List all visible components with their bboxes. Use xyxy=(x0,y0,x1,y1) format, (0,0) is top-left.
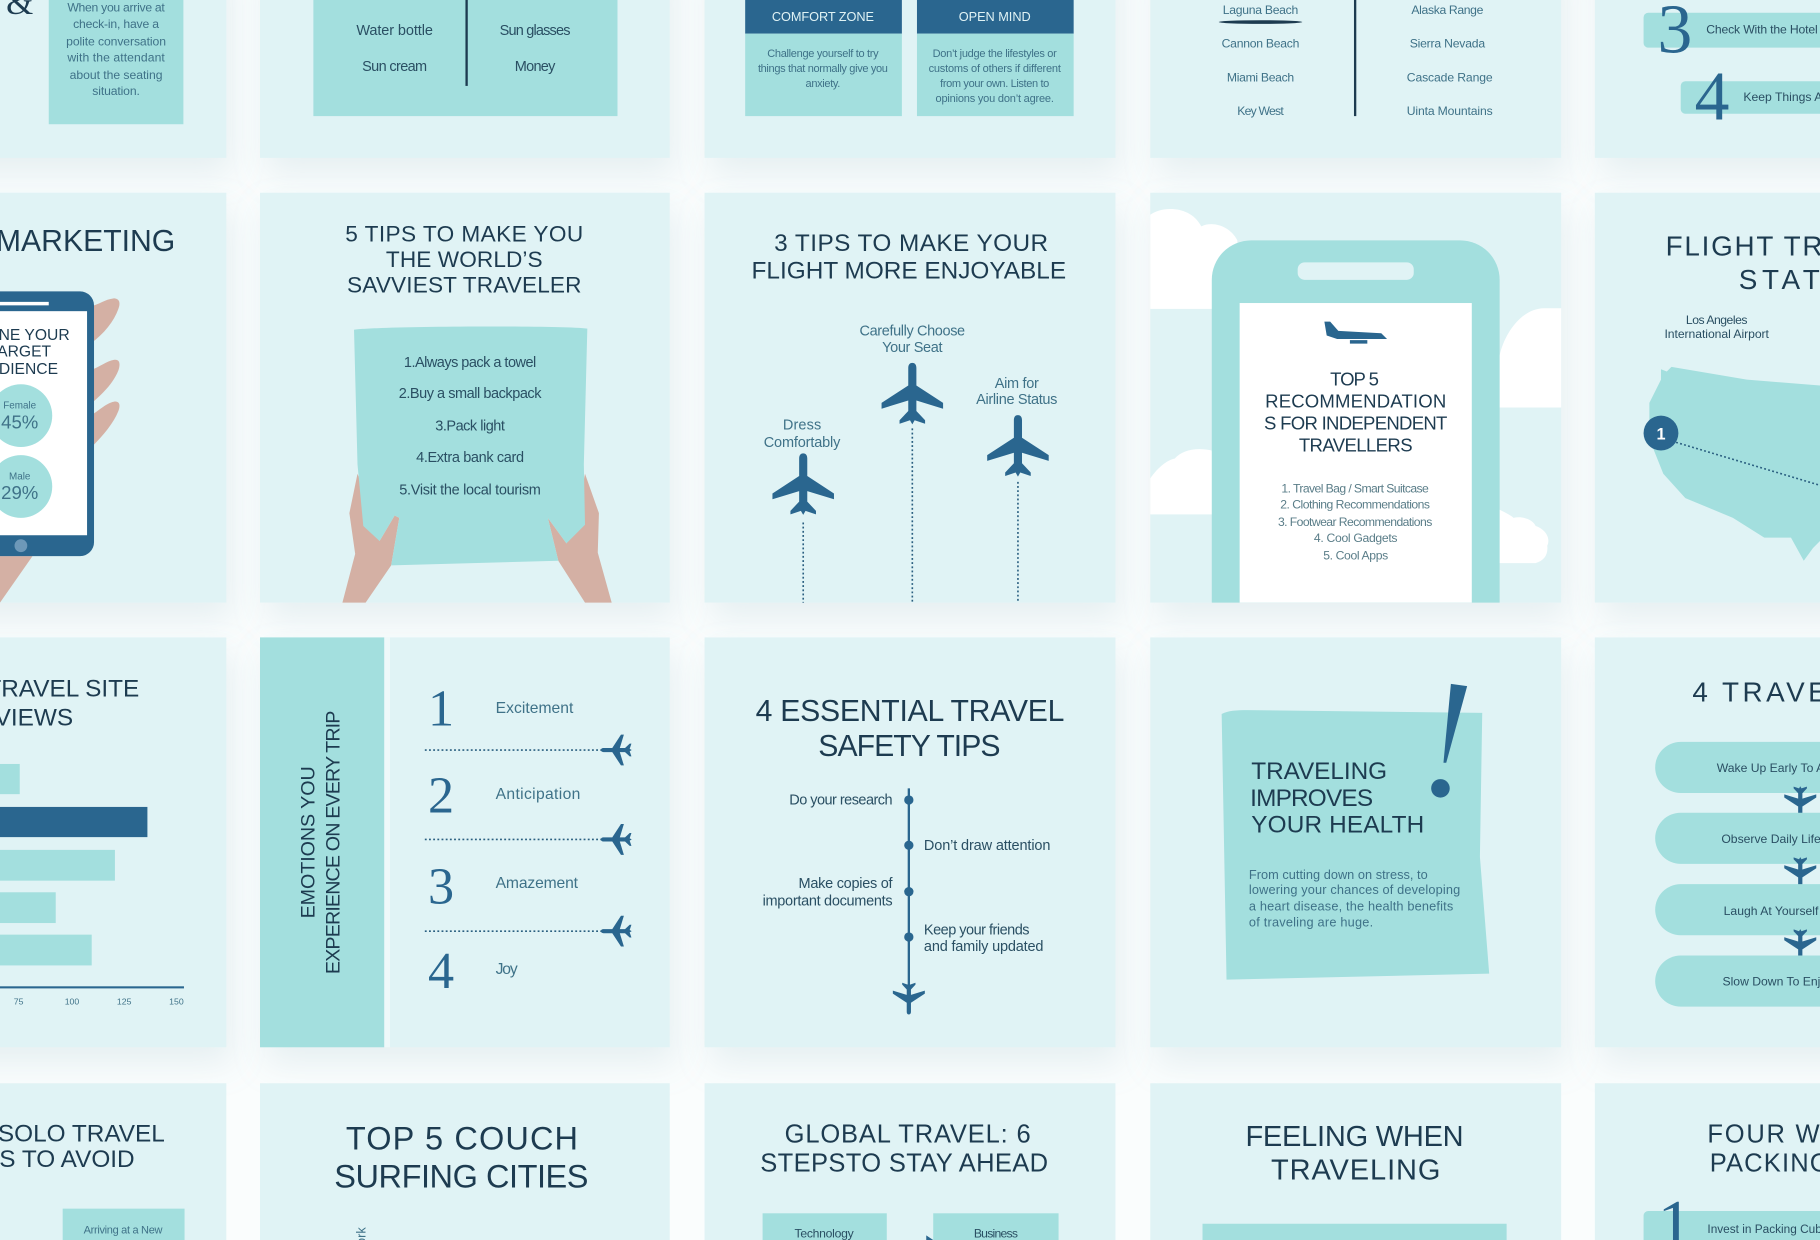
mint text box: Arriving at a New xyxy=(84,1225,163,1237)
mint text box xyxy=(63,1209,185,1240)
heading xyxy=(1707,1120,1820,1177)
paper sheet xyxy=(354,326,587,565)
safety tips: Don’t draw attention xyxy=(924,838,1050,854)
heading xyxy=(1666,230,1820,295)
mint sidebar with rotated heading: EXPERIENCE ON EVERY TRIP xyxy=(323,711,345,974)
male stat: Male xyxy=(9,472,31,483)
panel: 4 travel tips pills xyxy=(1595,637,1820,1047)
phone screen xyxy=(1240,303,1472,603)
map: western United States xyxy=(1649,367,1820,561)
mountain ranges column: Alaska Range xyxy=(1411,3,1484,17)
heading xyxy=(1250,758,1424,838)
mint list box: Sun cream xyxy=(362,59,427,75)
step 1 xyxy=(1644,1187,1820,1240)
body text: of traveling are huge. xyxy=(1249,915,1373,930)
male stat xyxy=(0,455,52,518)
tip: dress comfortably: Dress xyxy=(783,418,821,434)
mountain ranges column: Cascade Range xyxy=(1407,70,1493,84)
tip: airline status: Aim for xyxy=(995,376,1039,392)
body text: From cutting down on stress, to xyxy=(1249,867,1428,882)
beaches column xyxy=(1219,3,1302,118)
heading: FEELING WHEN xyxy=(1245,1121,1464,1153)
phone xyxy=(0,291,94,556)
mint text box: situation. xyxy=(92,84,140,98)
tip: airline status xyxy=(976,376,1057,603)
heading: SAVVIEST TRAVELER xyxy=(347,273,582,298)
comfort zone column: anxiety. xyxy=(806,78,840,90)
step 4 xyxy=(1681,59,1820,136)
panel: beaches and mountain ranges xyxy=(1150,0,1561,158)
icon: plane 1 xyxy=(1784,786,1816,818)
heading: 3 TIPS TO MAKE YOUR xyxy=(774,230,1048,257)
emotion 3: 3 xyxy=(428,857,454,915)
timeline xyxy=(893,788,925,1015)
panel: hotel tips (top right) xyxy=(1595,0,1820,158)
tip: airline status: Airline Status xyxy=(976,392,1057,408)
open mind column: opinions you don’t agree. xyxy=(936,93,1054,105)
emotion 1: Excitement xyxy=(496,700,574,717)
tips list: 3.Pack light xyxy=(435,419,505,435)
emotion 1 xyxy=(428,680,574,738)
open mind column: OPEN MIND xyxy=(959,9,1031,24)
mint list box xyxy=(313,0,618,116)
comfort zone column: things that normally give you xyxy=(758,63,888,75)
emotion 2: Anticipation xyxy=(496,786,580,803)
body text xyxy=(1249,867,1460,930)
recommendations heading xyxy=(1264,368,1447,456)
panel: top 5 recommendations phone xyxy=(1150,193,1561,603)
emotion 2 xyxy=(428,767,580,825)
clouds xyxy=(1150,209,1561,563)
phone body xyxy=(1212,240,1500,603)
heading xyxy=(756,695,1064,763)
tips list xyxy=(399,355,542,499)
recommendations list: 3. Footwear Recommendations xyxy=(1278,515,1432,529)
female stat xyxy=(0,384,52,447)
recommendations list: 2. Clothing Recommendations xyxy=(1280,498,1430,512)
mountain ranges column xyxy=(1407,3,1493,118)
open mind column xyxy=(917,0,1074,116)
recommendations list: 5. Cool Apps xyxy=(1323,549,1388,563)
recommendations list: 4. Cool Gadgets xyxy=(1314,531,1398,545)
tip: carefully choose your seat: Carefully Choose xyxy=(860,324,965,340)
heading: 4 ESSENTIAL TRAVEL xyxy=(756,695,1064,728)
panel: feeling when traveling xyxy=(1150,1083,1561,1240)
icon: plane 1 xyxy=(601,735,632,765)
panel: 4 essential travel safety tips xyxy=(705,637,1115,1047)
mint text box: check-in, have a xyxy=(73,17,159,31)
tip: carefully choose your seat xyxy=(860,324,965,603)
heading: SOLO TRAVEL xyxy=(0,1120,165,1147)
heading xyxy=(760,1120,1048,1177)
recommendations heading: TRAVELLERS xyxy=(1299,435,1413,456)
comfort zone column xyxy=(745,0,902,116)
tip: carefully choose your seat: Your Seat xyxy=(882,340,943,356)
tip: dress comfortably: Comfortably xyxy=(764,435,841,451)
icon: plane 2 xyxy=(601,824,632,855)
marker 1: 1 xyxy=(1656,425,1666,443)
recommendations heading: S FOR INDEPENDENT xyxy=(1264,413,1447,434)
icon: side plane xyxy=(1324,322,1387,344)
panel: marketing phone xyxy=(0,193,226,603)
hand holding phone xyxy=(0,298,120,603)
heading: TOP 5 COUCH xyxy=(346,1120,578,1156)
bar chart: 75 xyxy=(14,996,24,1006)
heading: GLOBAL TRAVEL: 6 xyxy=(785,1120,1031,1148)
icon: plane 3 xyxy=(1784,929,1816,961)
airport label: International Airport xyxy=(1664,327,1770,341)
panel: emotions on every trip xyxy=(260,637,670,1047)
mint text box xyxy=(49,0,183,124)
recommendations list xyxy=(1278,481,1432,563)
emotion 3: Amazement xyxy=(496,875,579,892)
technology box xyxy=(763,1213,887,1240)
mint text box: polite conversation xyxy=(66,34,166,48)
comfort zone column: Challenge yourself to try xyxy=(767,48,879,60)
mint sidebar with rotated heading: EMOTIONS YOU xyxy=(298,766,320,918)
heading xyxy=(334,1120,588,1195)
mint text box: When you arrive at xyxy=(67,1,165,15)
left hand xyxy=(342,474,399,603)
female stat: 45% xyxy=(1,411,38,432)
panel: packing list xyxy=(260,0,670,158)
step 3: Check With the Hotel xyxy=(1706,23,1818,37)
heading: 5 TIPS TO MAKE YOU xyxy=(345,221,583,246)
heading: TRAVELING xyxy=(1251,758,1387,785)
emotion 4 xyxy=(428,942,518,1000)
tips list: 5.Visit the local tourism xyxy=(399,483,541,499)
bar chart: 150 xyxy=(169,996,184,1006)
panel: 3 flight tips xyxy=(705,193,1115,603)
icon: plane 2 xyxy=(1784,857,1816,889)
heading: THE WORLD’S xyxy=(386,247,543,272)
pill 2 xyxy=(1655,813,1820,864)
male stat: 29% xyxy=(1,482,38,503)
emotion 1: 1 xyxy=(428,680,454,738)
business box xyxy=(933,1213,1059,1240)
heading: MARKETING xyxy=(0,225,175,258)
tips list: 2.Buy a small backpack xyxy=(399,386,542,402)
open mind column: from your own. Listen to xyxy=(940,78,1049,90)
open mind column: Don’t judge the lifestyles or xyxy=(933,48,1057,60)
panel: traveling improves your health xyxy=(1150,637,1561,1047)
beaches column: Key West xyxy=(1237,104,1284,118)
marker 1 xyxy=(1644,416,1678,450)
emotion 2: 2 xyxy=(428,767,454,825)
panel: top 5 couch surfing cities xyxy=(260,1083,670,1240)
tips list: 1.Always pack a towel xyxy=(404,355,536,371)
beaches column: Laguna Beach xyxy=(1223,3,1298,17)
panel: flight travel stats map xyxy=(1595,193,1820,603)
bar chart xyxy=(0,764,184,1006)
step 3 xyxy=(1644,0,1820,68)
recommendations heading: RECOMMENDATION xyxy=(1265,391,1446,412)
heading xyxy=(752,230,1066,285)
mint chart box xyxy=(1202,1224,1507,1240)
heading: TRAVELING xyxy=(1271,1155,1440,1187)
safety tips xyxy=(763,793,1050,955)
mint text box: with the attendant xyxy=(66,51,165,65)
mint list box: Water bottle xyxy=(356,23,433,39)
mint list box: Sun glasses xyxy=(500,23,570,39)
safety tips: Do your research xyxy=(789,793,893,809)
heading: SURFING CITIES xyxy=(334,1159,588,1195)
safety tips: and family updated xyxy=(924,939,1043,955)
open mind column: customs of others if different xyxy=(929,63,1061,75)
arrow xyxy=(926,1235,933,1240)
mountain ranges column: Sierra Nevada xyxy=(1410,37,1485,51)
recommendations list: 1. Travel Bag / Smart Suitcase xyxy=(1281,481,1429,495)
tip: dress comfortably xyxy=(764,418,841,603)
right hand xyxy=(548,474,612,603)
heading: SAFETY TIPS xyxy=(818,730,1001,763)
airport label: Los Angeles xyxy=(1686,313,1747,327)
panel: 5 tips savviest traveler xyxy=(260,193,670,603)
airport label xyxy=(1664,313,1770,341)
heading xyxy=(345,221,583,298)
panel: solo travel mistakes xyxy=(0,1083,226,1240)
beaches column: Cannon Beach xyxy=(1222,37,1299,51)
pill 3 xyxy=(1655,884,1820,935)
beaches column: Miami Beach xyxy=(1227,70,1294,84)
heading: FLIGHT MORE ENJOYABLE xyxy=(752,258,1066,285)
pill 4 xyxy=(1655,956,1820,1007)
emotion 4: Joy xyxy=(496,961,518,978)
bar chart: 125 xyxy=(117,996,132,1006)
panel: global travel 6 steps xyxy=(705,1083,1115,1240)
emotion 3 xyxy=(428,857,579,915)
panel: seating conversation card (top left) xyxy=(0,0,226,158)
mountain ranges column: Uinta Mountains xyxy=(1407,104,1493,118)
route line xyxy=(1676,442,1820,485)
heading: IMPROVES xyxy=(1250,785,1373,812)
body text: lowering your chances of developing xyxy=(1249,882,1460,897)
panel: four packing tips xyxy=(1595,1083,1820,1240)
pill 1 xyxy=(1655,742,1820,793)
safety tips: Make copies of xyxy=(799,876,894,892)
safety tips: Keep your friends xyxy=(924,923,1030,939)
note sheet xyxy=(1222,710,1489,980)
panel: travel site reviews bar chart xyxy=(0,637,226,1047)
mint text box: about the seating xyxy=(70,68,163,82)
bar chart: 100 xyxy=(65,996,79,1006)
emotion 4: 4 xyxy=(428,942,454,1000)
heading xyxy=(0,1120,165,1173)
icon: plane 3 xyxy=(601,916,632,947)
recommendations heading: TOP 5 xyxy=(1330,368,1379,389)
heading: STEPSTO STAY AHEAD xyxy=(760,1149,1048,1177)
panel: comfort zone and open mind xyxy=(705,0,1115,158)
mint list box: Money xyxy=(515,59,556,75)
heading: YOUR HEALTH xyxy=(1251,811,1424,838)
icon: exclamation mark xyxy=(1431,684,1467,798)
heading xyxy=(1245,1121,1464,1187)
safety tips: important documents xyxy=(763,894,893,910)
step 4: 4 xyxy=(1695,59,1729,136)
mint sidebar with rotated heading xyxy=(260,637,384,1047)
comfort zone column: COMFORT ZONE xyxy=(772,9,874,24)
tips list: 4.Extra bank card xyxy=(416,450,524,466)
heading xyxy=(0,676,139,732)
female stat: Female xyxy=(3,401,37,412)
body text: a heart disease, the health benefits xyxy=(1249,898,1453,913)
